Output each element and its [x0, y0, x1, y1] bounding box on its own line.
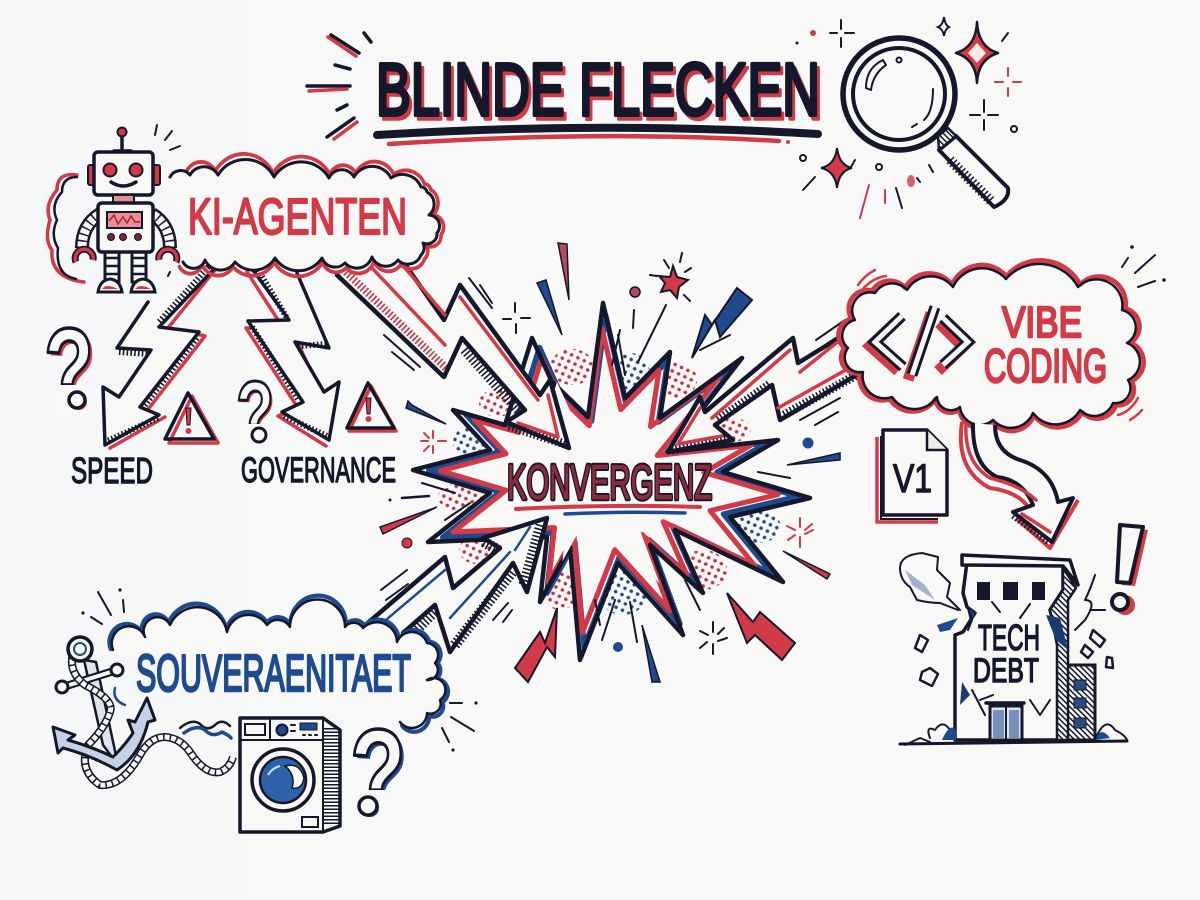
icon: exclamation mark	[1112, 525, 1148, 615]
icon: question mark speed: ?	[47, 307, 97, 437]
arrow: lightning Ki-Agenten to Konvergenz	[337, 260, 569, 448]
title: Blinde Flecken: BLINDE FLECKEN	[376, 48, 820, 131]
label: Tech Debt: TECH	[978, 617, 1040, 658]
icon: question mark speed: ?	[44, 304, 94, 434]
burst debris: spikes, stars, bolts	[380, 243, 840, 682]
arrow: lightning Souveraenitaet to Konvergenz	[363, 518, 547, 652]
burst: Konvergenz explosion	[413, 303, 810, 660]
icon: washing machine	[240, 718, 340, 832]
icon: question mark sovereignty: ?	[350, 705, 406, 843]
icon: crumbling building Tech Debt	[900, 553, 1127, 745]
icon: anchor with rope	[53, 637, 233, 785]
label: Tech Debt: DEBT	[973, 652, 1039, 690]
icon: question mark sovereignty: ?	[353, 708, 409, 846]
heading: Konvergenz: KONVERGENZ	[507, 456, 712, 510]
heading: Konvergenz	[507, 456, 712, 514]
arrow: Vibe Coding to Tech Debt	[961, 422, 1078, 548]
title: Blinde Flecken: BLINDE FLECKEN	[379, 52, 823, 135]
halftone dots	[438, 349, 781, 615]
panel: Ki-Agenten cloud	[47, 154, 444, 282]
icon: robot	[75, 125, 180, 292]
icon: magnifying glass	[843, 38, 1008, 207]
arrow: lightning Vibe Coding to Konvergenz	[668, 320, 865, 452]
heading: Souveraenitaet: SOUVERAENITAET	[136, 645, 411, 703]
label: Tech Debt	[973, 617, 1040, 690]
panel: Souveraenitaet cloud	[81, 588, 478, 752]
sparkles around magnifier	[796, 17, 1021, 218]
icon: V1 document: V1	[893, 457, 932, 501]
icon: V1 document	[877, 430, 947, 522]
icon: warning triangle speed	[165, 393, 218, 443]
icon: question mark governance: ?	[236, 364, 274, 464]
heading: KI-Agenten: KI-AGENTEN	[188, 188, 407, 245]
panel: Vibe Coding cloud	[839, 245, 1166, 431]
icon: warning triangle governance	[347, 383, 396, 431]
heading: Vibe Coding	[984, 298, 1107, 392]
title: Blinde Flecken	[376, 48, 823, 144]
label: Governance: GOVERNANCE	[241, 451, 396, 490]
label: Speed: SPEED	[71, 450, 153, 491]
icon: wave	[180, 722, 231, 738]
arrow: lightning Ki-Agenten to Governance	[246, 270, 339, 446]
heading: Vibe Coding: VIBE	[1002, 298, 1082, 347]
heading: Konvergenz: KONVERGENZ	[507, 456, 712, 510]
arrow: lightning Ki-Agenten to Speed	[103, 264, 215, 448]
icon: code brackets	[870, 307, 968, 380]
title accent ticks	[307, 33, 371, 139]
icon: question mark governance: ?	[238, 366, 276, 466]
heading: Vibe Coding: CODING	[984, 339, 1107, 392]
